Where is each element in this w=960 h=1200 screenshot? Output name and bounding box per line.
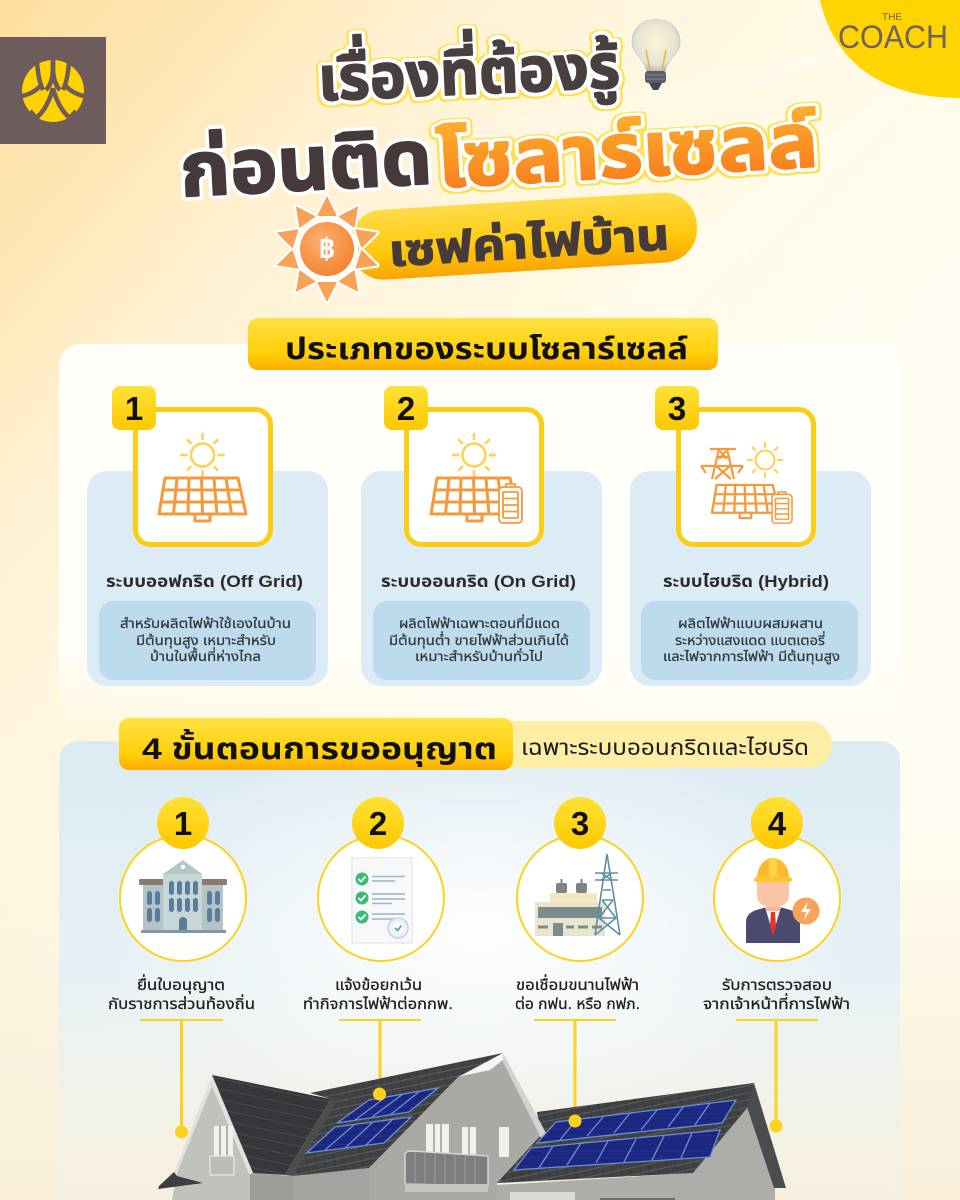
step text: ทำกิจการไฟฟ้าต่อกกพ. [303, 995, 453, 1013]
panel: solar system types [59, 318, 900, 730]
subtitle pill [348, 191, 699, 282]
number circle 1: 1 [174, 805, 192, 842]
number circle 2 [352, 797, 404, 849]
description box: มีต้นทุนต่ำ ขายไฟฟ้าส่วนเกินได้ [389, 631, 569, 649]
connector to house [534, 1019, 616, 1120]
step text [108, 974, 255, 1013]
title line 2 orange: โซลาร์เซลล์ [434, 98, 820, 204]
icon: substation and pylon [517, 835, 643, 961]
title line 2 dark: ก่อนติด [178, 115, 434, 213]
house walls [172, 1060, 775, 1200]
number circle 4 [751, 797, 803, 849]
step text: แจ้งข้อยกเว้น [335, 977, 422, 994]
step text: กับราชการส่วนท้องถิ่น [108, 994, 255, 1013]
icon box: solar panel [136, 410, 270, 544]
step text: ต่อ กฟน. หรือ กฟภ. [515, 995, 640, 1013]
heading: 4 permit steps: 4 ขั้นตอนการขออนุญาต [142, 728, 497, 767]
step text: จากเจ้าหน้าที่การไฟฟ้า [703, 993, 850, 1013]
description box: บ้านในพื้นที่ห่างไกล [150, 647, 261, 664]
logo: Krungsri emblem [0, 37, 106, 144]
step text [703, 977, 850, 1013]
subtitle pill: เซฟค่าไฟบ้าน [387, 210, 671, 276]
step 3 [515, 797, 643, 1120]
icon box: solar panel with battery [406, 410, 542, 544]
panel: permit steps [59, 718, 900, 1200]
description box: และไฟจากการไฟฟ้า มีต้นทุนสูง [663, 649, 840, 665]
description box: เหมาะสำหรับบ้านทั่วไป [415, 648, 543, 664]
description box [99, 601, 316, 680]
pin dots over house [175, 1088, 782, 1138]
step text [515, 974, 640, 1013]
description box: มีต้นทุนสูง เหมาะสำหรับ [136, 633, 276, 649]
number circle 3: 3 [571, 805, 589, 842]
heading: system types [248, 318, 718, 370]
icon: baht sun [274, 196, 380, 302]
heading: system types: ประเภทของระบบโซลาร์เซลล์ [285, 333, 688, 366]
card: on grid [361, 386, 602, 686]
number badge 3: 3 [668, 390, 686, 427]
step text: ยื่นใบอนุญาต [137, 974, 225, 994]
step text [303, 977, 453, 1013]
icon: light bulb [631, 18, 681, 90]
description box: สำหรับผลิตไฟฟ้าใช้เองในบ้าน [120, 616, 291, 631]
card title: ระบบออฟกริด (Off Grid) [106, 572, 303, 591]
description box [641, 601, 858, 680]
number circle 4: 4 [768, 805, 787, 842]
card title: ระบบไฮบริด (Hybrid) [663, 572, 829, 591]
step 1 [108, 797, 255, 1132]
title line 2 orange: โซลาร์เซลล์ [434, 98, 820, 204]
card: off grid [87, 386, 328, 686]
card: hybrid [630, 386, 871, 686]
step 4 [703, 797, 850, 1126]
step text: รับการตรวจสอบ [722, 977, 832, 994]
solar panels [306, 1088, 736, 1170]
icon: checklist document [318, 835, 444, 961]
heading note pill [490, 721, 832, 768]
icon: engineer with hard hat [714, 835, 840, 961]
connector to house [339, 1019, 421, 1094]
heading note pill: เฉพาะระบบออนกริดและไฮบริด [521, 735, 809, 760]
description box: ผลิตไฟฟ้าเฉพาะตอนที่มีแดด [399, 614, 560, 631]
number circle 1 [157, 797, 209, 849]
brand corner: The Coach: COACH [838, 19, 948, 55]
heading: 4 permit steps [119, 718, 513, 770]
connector to house [140, 1019, 223, 1132]
number badge 3 [655, 386, 699, 430]
title line 1: เรื่องที่ต้องรู้ [316, 22, 621, 118]
number circle 3 [554, 797, 606, 849]
house with solar panels [158, 1053, 786, 1200]
icon: government building [120, 835, 246, 961]
description box: ผลิตไฟฟ้าแบบผสมผสาน [678, 616, 823, 631]
icon: baht sun: ฿ [319, 234, 335, 266]
number badge 1: 1 [125, 390, 143, 427]
windows and balcony [210, 1124, 509, 1192]
number badge 1 [112, 386, 156, 430]
description box: ระหว่างแสงแดด แบตเตอรี่ [675, 631, 825, 648]
number badge 2 [384, 386, 428, 430]
brand corner: The Coach [820, 0, 960, 98]
step 2 [303, 797, 453, 1094]
description box [373, 601, 590, 680]
icon box: pylon, sun, solar panel and battery [678, 410, 814, 544]
title line 1: เรื่องที่ต้องรู้ [316, 22, 621, 118]
number circle 2: 2 [369, 805, 387, 842]
card title: ระบบออนกริด (On Grid) [381, 572, 576, 591]
title line 2 dark: ก่อนติด [178, 115, 434, 213]
connector to house [736, 1019, 818, 1126]
number badge 2: 2 [397, 390, 415, 427]
brand corner: The Coach: THE [882, 12, 902, 23]
roofs [158, 1053, 786, 1189]
step text: ขอเชื่อมขนานไฟฟ้า [516, 974, 639, 994]
